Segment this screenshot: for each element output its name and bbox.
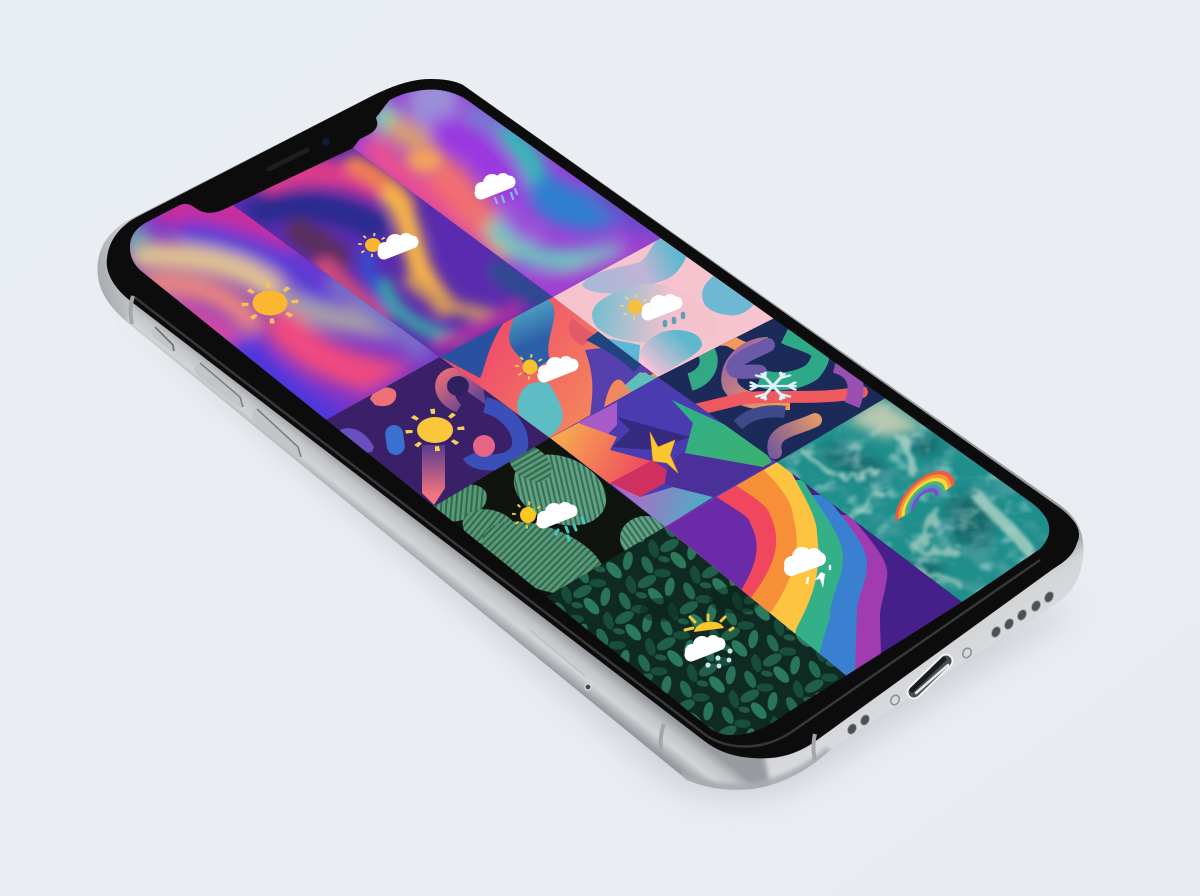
icon: snowflake <box>751 373 795 399</box>
icon: lightning bolt <box>650 432 678 473</box>
icon: sun, cloud and snow <box>685 615 733 668</box>
notch speaker <box>269 150 307 169</box>
phone <box>98 79 1084 805</box>
tile: tropical leaves <box>434 438 665 593</box>
phone body <box>98 79 1084 790</box>
icon: rain cloud <box>475 173 517 203</box>
icon: sun and cloud on waves <box>517 356 573 379</box>
icon: sun <box>241 282 299 324</box>
right lobe <box>702 275 755 315</box>
central lobe <box>592 284 671 342</box>
charging port <box>912 659 948 693</box>
microphone hole <box>585 684 591 690</box>
screen <box>130 90 1050 736</box>
tile: dark leaves <box>546 527 846 736</box>
icon: sun, cloud and drops <box>622 294 683 325</box>
lower lobe <box>640 330 702 375</box>
volume up <box>194 363 243 408</box>
volume up edge <box>200 363 243 407</box>
icon: yellow sun <box>405 408 465 452</box>
tile: rain gradient <box>353 90 661 297</box>
tile: wavy teal and coral <box>440 295 660 440</box>
icon: storm cloud <box>784 547 830 588</box>
volume down <box>252 409 301 457</box>
tile: rainbow waves <box>665 462 962 676</box>
bottom screws <box>889 647 973 706</box>
bezel highlight <box>133 296 1040 747</box>
upper lobe <box>582 238 690 293</box>
bottom speaker right <box>990 590 1055 639</box>
tile: sunny gradient <box>130 204 440 420</box>
mute switch edge <box>155 327 174 351</box>
bezel <box>107 79 1079 758</box>
tile: geometric storm <box>550 375 780 530</box>
tile: pink clouds <box>553 238 774 377</box>
volume down edge <box>257 409 301 457</box>
mute switch <box>152 327 174 352</box>
antenna bands <box>131 296 815 760</box>
bottom speaker left <box>846 713 871 736</box>
icon: rainbow <box>895 461 953 520</box>
tile: partly cloudy gradient <box>233 148 553 357</box>
tile: snow ribbons <box>658 318 885 462</box>
notch camera <box>322 138 330 146</box>
tile: abstract shapes sunny <box>326 357 550 506</box>
tile: ocean <box>777 398 1050 602</box>
sim tray <box>530 630 585 676</box>
icon: sun, cloud and rain on leaves <box>514 502 584 540</box>
icon: sun and cloud <box>360 233 413 256</box>
phone shadow <box>110 300 1075 797</box>
side buttons <box>152 327 301 457</box>
